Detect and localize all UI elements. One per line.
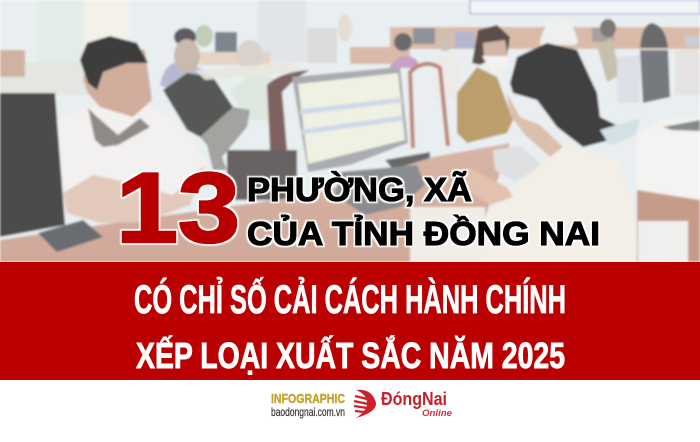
number 13: 13 [116,152,240,263]
clerk woman foreground [467,43,637,262]
footer logo block [0,380,700,442]
heading line: của tỉnh Đồng Nai: CỦA TỈNH ĐỒNG NAI [247,215,600,252]
heading line: phường, xã: PHƯỜNG, XÃ [247,171,472,208]
right side desk items [640,50,670,103]
monitor with application screen [292,67,408,172]
man in white polo [57,36,207,223]
label: website: baodongnai.com.vn [271,405,345,419]
back row visitors [394,33,412,51]
chairs [410,64,448,148]
woman in mask [457,67,513,143]
logo wordmark: Dong Nai: ĐóngNai [381,389,447,409]
back row staff [600,19,616,37]
desk [0,143,510,262]
seated citizens background [174,28,196,46]
icon: Dong Nai logo mark [354,390,376,418]
band line 2: XẾP LOẠI XUẤT SẮC NĂM 2025 [136,334,565,376]
logo wordmark: Online: Online [422,408,453,419]
left monitor [0,93,65,237]
red band [0,262,700,380]
background photo: office service counter [0,0,700,262]
label: infographic: INFOGRAPHIC [271,391,345,406]
